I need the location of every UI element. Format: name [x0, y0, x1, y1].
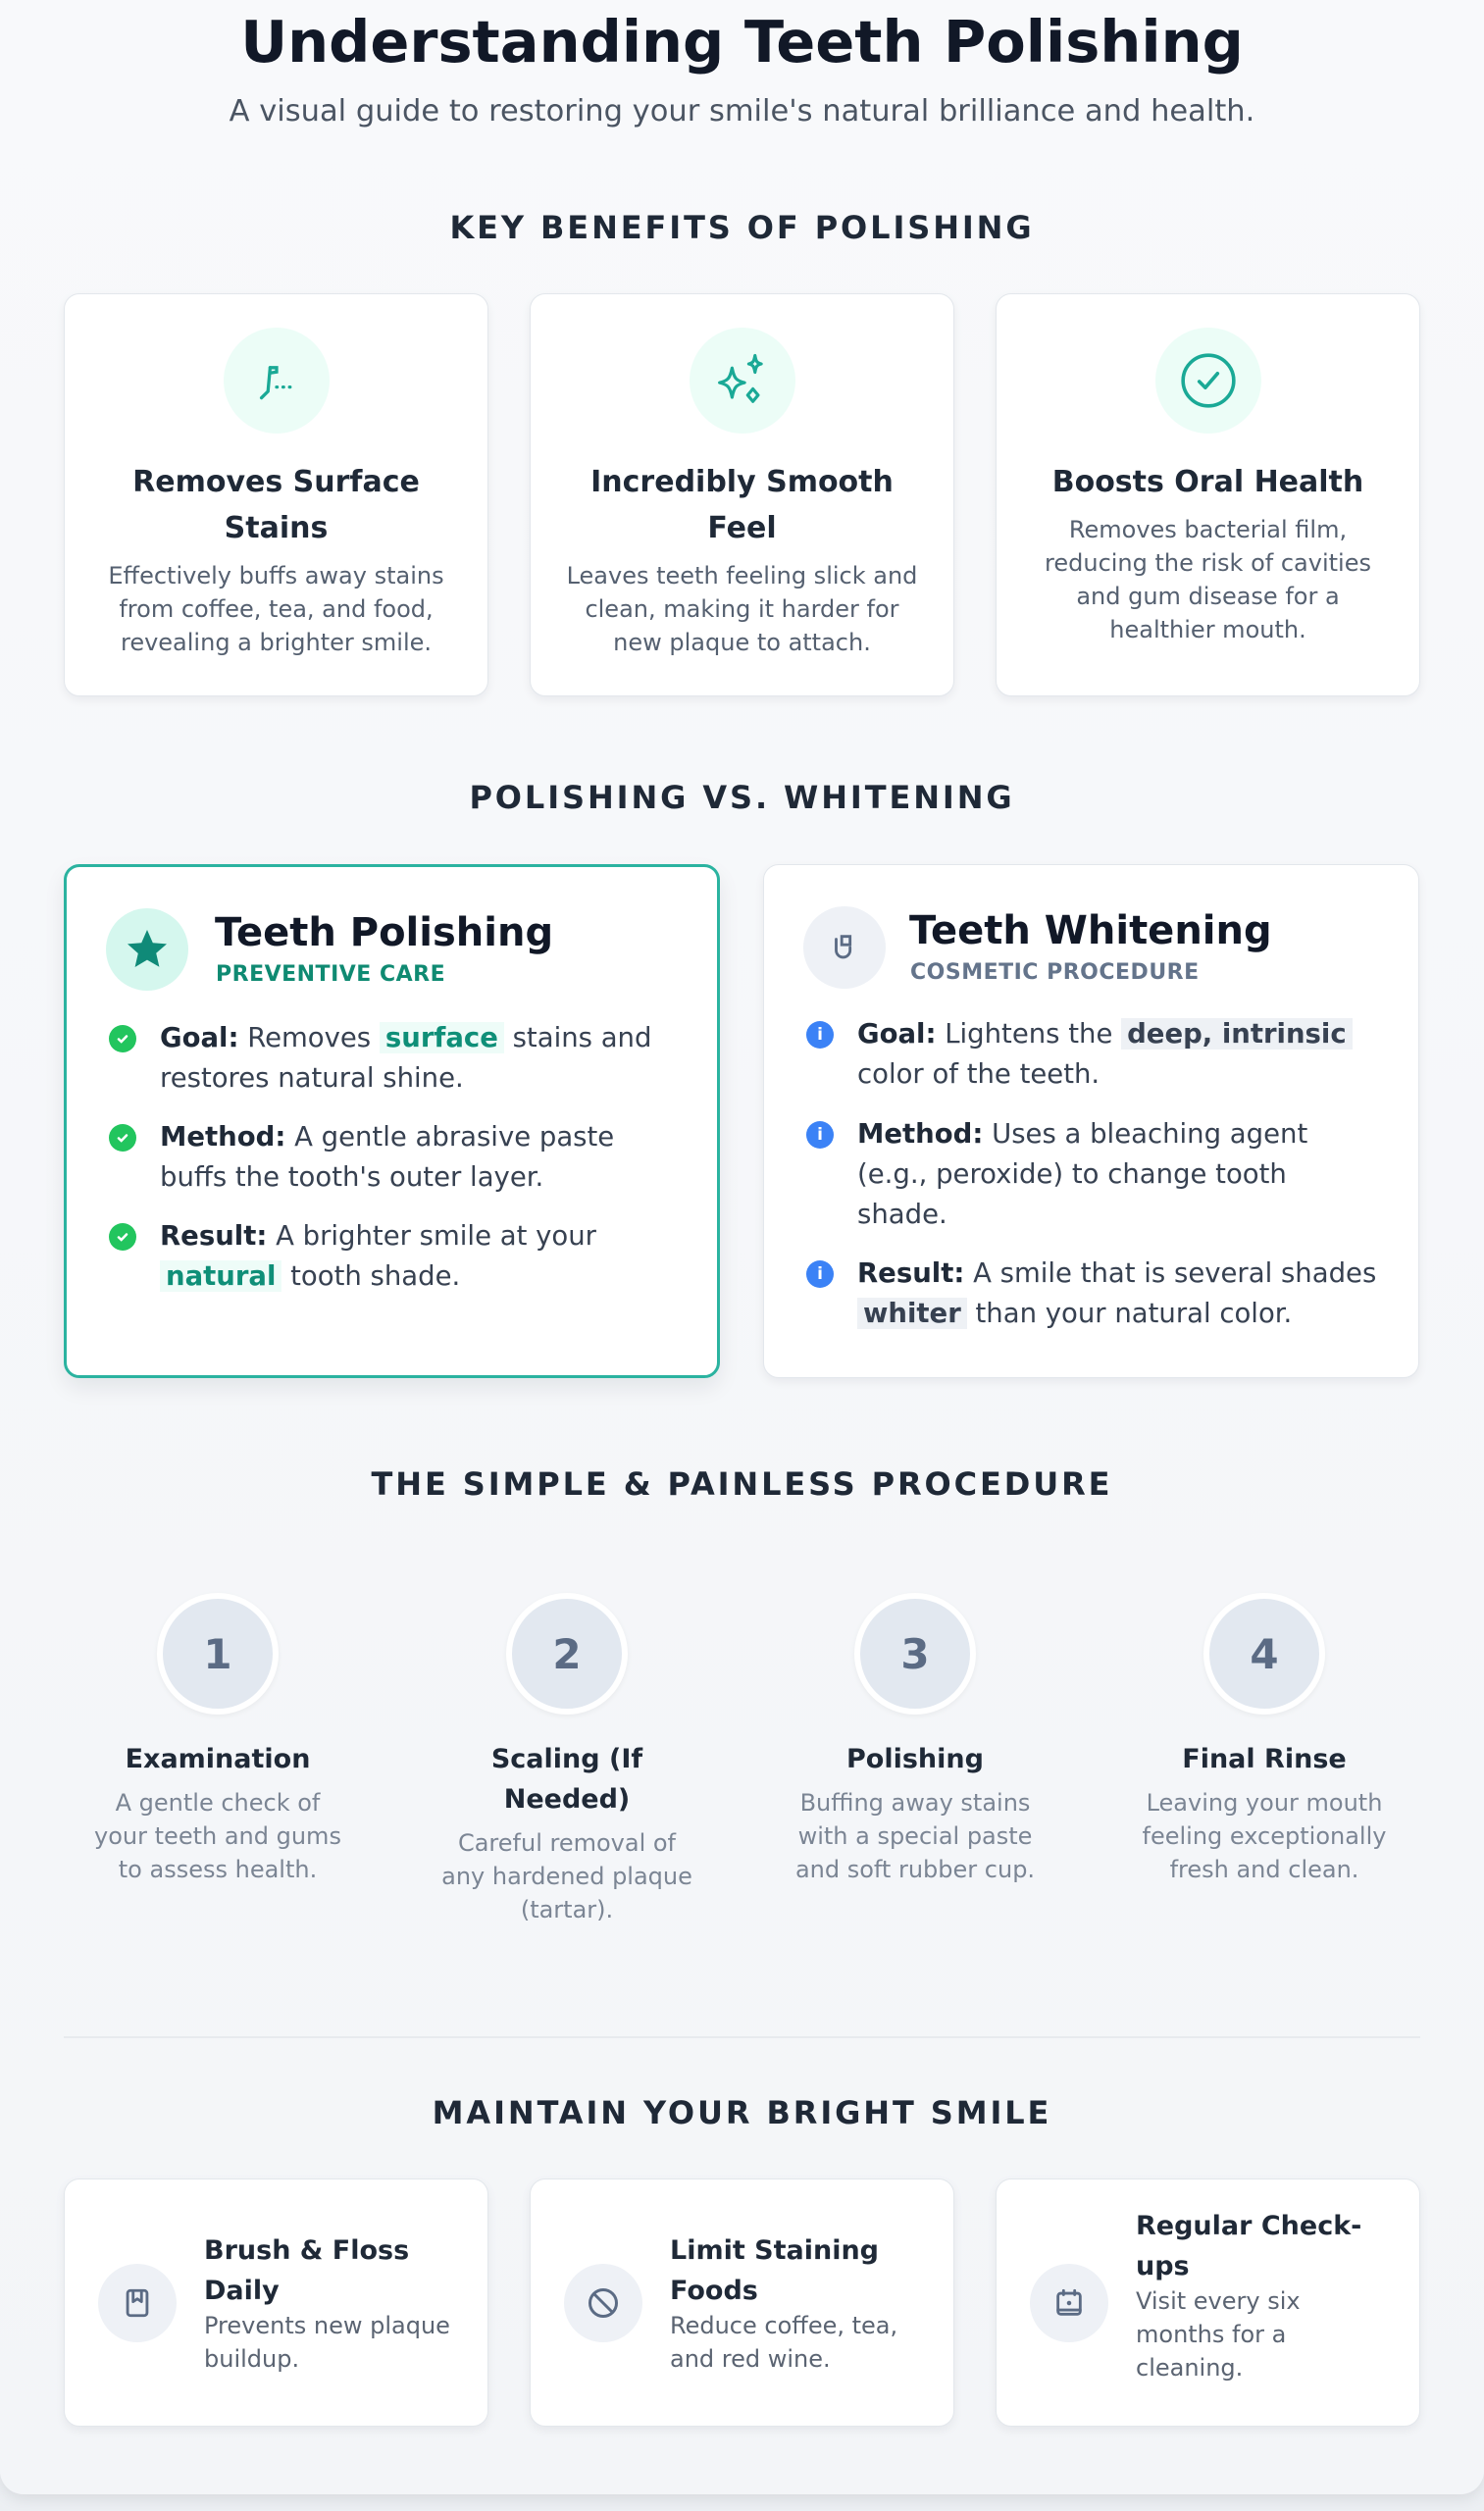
text: Leaves teeth feeling slick and clean, making it harder for new plaque to attach.	[567, 562, 917, 656]
panel: teeth whitening: i	[817, 1124, 823, 1144]
heading: polishing vs whitening: POLISHING VS. WHITENING	[469, 779, 1015, 816]
step text: Careful removal of any hardened plaque (tartar).	[441, 1829, 692, 1923]
step text: Leaving your mouth feeling exceptionally fresh and clean.	[1143, 1789, 1386, 1883]
step title: Final Rinse	[1182, 1744, 1347, 1774]
step title: Examination	[126, 1744, 310, 1774]
card subtitle: PREVENTIVE CARE	[216, 962, 445, 987]
icon: sparkles	[689, 328, 794, 434]
subtitle: A visual guide to restoring your smile's natural brilliance and health.	[230, 94, 1254, 128]
panel: limit foods	[530, 2178, 954, 2427]
icon: book	[98, 2264, 177, 2342]
number circle: 2	[552, 1630, 582, 1677]
text	[204, 2234, 450, 2372]
item: goal: Goal: Lightens the deep, intrinsic color of the teeth.	[857, 1018, 1347, 1090]
number circle: 4	[1250, 1630, 1279, 1677]
heading: procedure: THE SIMPLE & PAINLESS PROCEDURE	[372, 1465, 1112, 1503]
number circle: 3	[900, 1630, 930, 1677]
step 2	[441, 1593, 692, 1923]
heading: key benefits: KEY BENEFITS OF POLISHING	[449, 209, 1035, 246]
text: Prevents new plaque buildup.	[204, 2311, 450, 2372]
title: Understanding Teeth Polishing	[240, 8, 1244, 76]
icon: star	[106, 908, 188, 991]
panel: check-ups	[996, 2178, 1420, 2427]
step title: Scaling (If Needed)	[491, 1744, 642, 1815]
panel: benefit oral health	[996, 293, 1420, 696]
number circle	[1203, 1593, 1325, 1715]
icon: ban	[564, 2264, 642, 2342]
step 3	[795, 1593, 1035, 1883]
item: result: Result: A brighter smile at your natural tooth shade.	[160, 1220, 596, 1292]
text: Brush & Floss Daily	[204, 2234, 409, 2305]
card subtitle: COSMETIC PROCEDURE	[910, 960, 1200, 985]
panel: teeth whitening: i	[817, 1024, 823, 1044]
panel: benefit removes stains	[64, 293, 488, 696]
icon: polishing tool	[224, 328, 330, 434]
heading: Removes Surface Stains	[132, 465, 420, 545]
icon: calendar	[1030, 2264, 1108, 2342]
item: method: Method: Uses a bleaching agent (e.g., peroxide) to change tooth shade.	[857, 1118, 1307, 1230]
step 1	[94, 1593, 341, 1883]
heading: Boosts Oral Health	[1052, 465, 1363, 499]
text	[670, 2234, 897, 2372]
icon: tooth	[803, 906, 886, 989]
number circle	[157, 1593, 279, 1715]
item: result: Result: A smile that is several shades whiter than your natural color.	[857, 1257, 1376, 1329]
text: Regular Check-ups	[1136, 2211, 1361, 2281]
text: Visit every six months for a cleaning.	[1136, 2287, 1301, 2382]
panel: benefit smooth feel	[530, 293, 954, 696]
text: Effectively buffs away stains from coffee, tea, and food, revealing a brighter smile.	[108, 562, 444, 656]
step text: Buffing away stains with a special paste and soft rubber cup.	[795, 1789, 1035, 1883]
number circle	[854, 1593, 976, 1715]
text	[1136, 2211, 1361, 2382]
item: goal: Goal: Removes surface stains and restores natural shine.	[160, 1022, 651, 1094]
step 4	[1143, 1593, 1386, 1883]
icon: check circle	[1155, 328, 1261, 434]
card title: Teeth Polishing	[215, 910, 553, 955]
step title: Polishing	[846, 1744, 984, 1774]
panel: brush & floss	[64, 2178, 488, 2427]
number circle: 1	[203, 1630, 232, 1677]
item: method: Method: A gentle abrasive paste buffs the tooth's outer layer.	[160, 1121, 614, 1193]
panel: teeth whitening	[763, 864, 1419, 1378]
card title: Teeth Whitening	[909, 908, 1272, 953]
number circle	[506, 1593, 628, 1715]
step text: A gentle check of your teeth and gums to assess health.	[94, 1789, 341, 1883]
panel: teeth whitening: i	[817, 1263, 823, 1283]
text: Reduce coffee, tea, and red wine.	[670, 2311, 897, 2372]
text: Limit Staining Foods	[670, 2234, 879, 2305]
panel: teeth polishing	[64, 864, 720, 1378]
text: Removes bacterial film, reducing the risk of cavities and gum disease for a healthier mouth.	[1045, 516, 1371, 643]
heading: maintain: MAINTAIN YOUR BRIGHT SMILE	[433, 2094, 1051, 2131]
heading: Incredibly Smooth Feel	[590, 465, 894, 545]
